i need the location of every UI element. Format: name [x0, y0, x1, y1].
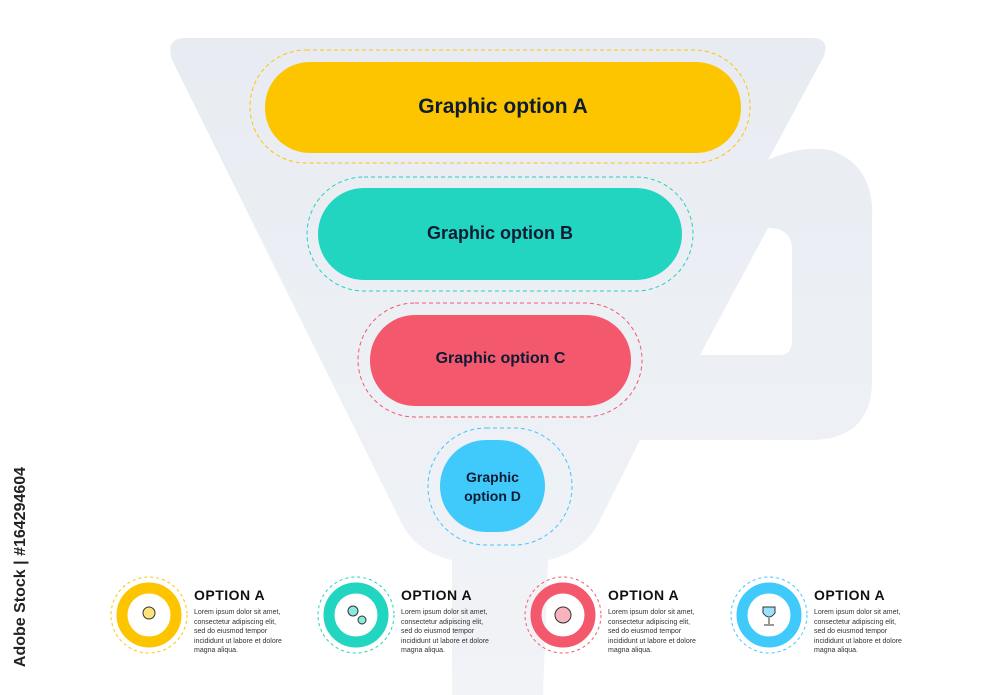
icon circle teal: [318, 577, 394, 653]
option text 4: [814, 587, 902, 654]
pill C: [358, 303, 642, 417]
side watermark text: Adobe Stock | #164294604: [12, 467, 29, 667]
bottom icons: [111, 577, 807, 653]
icon circle blue: [731, 577, 807, 653]
option text 3: OPTION A: [608, 587, 679, 603]
option text 2: [401, 587, 489, 654]
label D: option D: [464, 488, 521, 504]
option text 3: [608, 587, 696, 654]
label C: Graphic option C: [436, 350, 565, 367]
label A: Graphic option A: [418, 95, 588, 118]
icon circle red: [525, 577, 601, 653]
option text 4: OPTION A: [814, 587, 885, 603]
funnel pills: [250, 50, 750, 545]
option text 1: Lorem ipsum dolor sit amet, consectetur adipiscing elit, sed do eiusmod tempor incididunt ut labore et dolore magna aliqua.: [194, 609, 282, 654]
pill D: [428, 428, 572, 545]
label B: Graphic option B: [427, 223, 573, 243]
label D: Graphic: [466, 469, 519, 485]
option text 2: OPTION A: [401, 587, 472, 603]
pill B: [307, 177, 693, 291]
label D: [464, 469, 521, 504]
pill A: [250, 50, 750, 163]
option text 4: Lorem ipsum dolor sit amet, consectetur adipiscing elit, sed do eiusmod tempor incididunt ut labore et dolore magna aliqua.: [814, 609, 902, 654]
option text 1: OPTION A: [194, 587, 265, 603]
icon circle yellow: [111, 577, 187, 653]
option text 2: Lorem ipsum dolor sit amet, consectetur adipiscing elit, sed do eiusmod tempor incididunt ut labore et dolore magna aliqua.: [401, 609, 489, 654]
option text 3: Lorem ipsum dolor sit amet, consectetur adipiscing elit, sed do eiusmod tempor incididunt ut labore et dolore magna aliqua.: [608, 609, 696, 654]
option text 1: [194, 587, 282, 654]
